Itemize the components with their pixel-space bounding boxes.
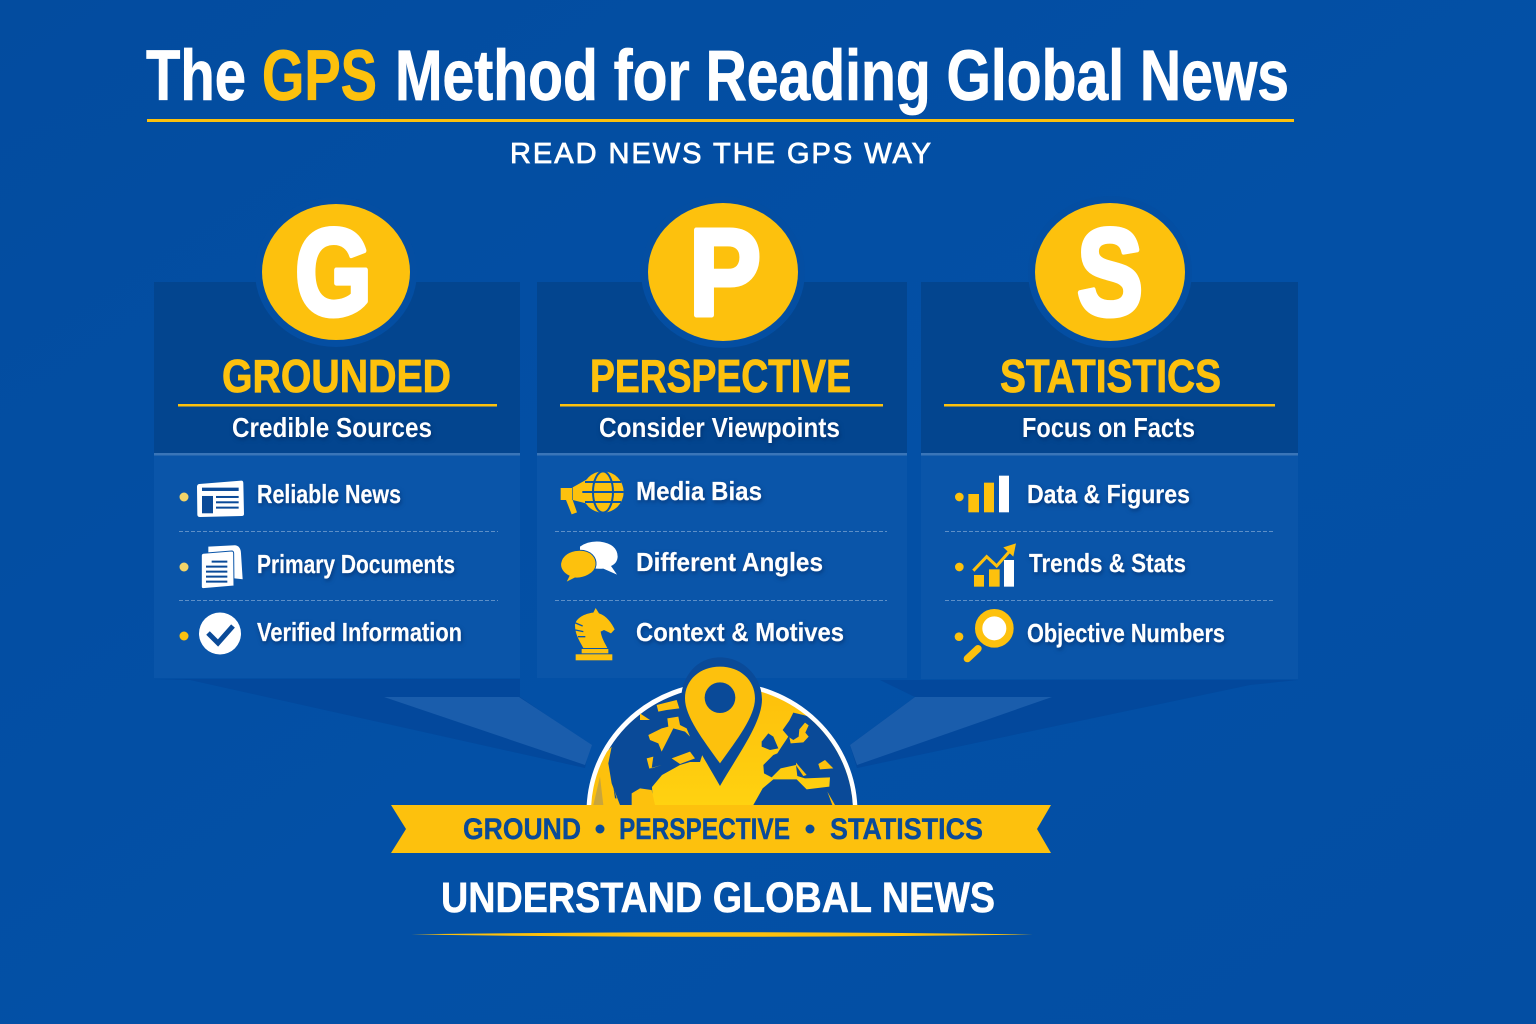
panel body background <box>921 453 1298 679</box>
ribbon banner: GROUND <box>463 813 581 846</box>
subheading: credible sources: Credible Sources <box>232 412 432 443</box>
badge S: S <box>1077 205 1143 342</box>
globe <box>586 686 858 805</box>
title underline <box>147 119 1294 122</box>
item: primary documents: Primary Documents <box>257 549 455 579</box>
item: different angles: Different Angles <box>636 547 823 577</box>
closing statement: UNDERSTAND GLOBAL NEWS <box>441 874 995 922</box>
item: objective numbers <box>955 613 1225 659</box>
subheading: consider viewpoints: Consider Viewpoints <box>599 412 840 443</box>
ribbon banner <box>391 805 1051 853</box>
heading: statistics: STATISTICS <box>1000 350 1221 402</box>
badge G: G <box>295 205 372 342</box>
beams toward globe <box>154 679 1298 768</box>
closing underline <box>411 932 1033 937</box>
item: media bias: Media Bias <box>636 476 762 506</box>
subheading: focus on facts: Focus on Facts <box>1022 412 1195 443</box>
heading: perspective: PERSPECTIVE <box>590 350 851 402</box>
item: context and motives: Context & Motives <box>636 617 844 647</box>
badge S <box>1028 196 1192 348</box>
heading: grounded: GROUNDED <box>222 350 451 402</box>
item: trends and stats <box>955 543 1186 587</box>
item: objective numbers: Objective Numbers <box>1027 618 1225 648</box>
subtitle: READ NEWS THE GPS WAY <box>510 138 931 170</box>
globe with location pin <box>586 658 858 805</box>
item: verified information <box>180 612 462 654</box>
title: GPS <box>262 37 377 116</box>
location pin <box>681 657 762 786</box>
item: trends and stats: Trends & Stats <box>1029 548 1186 578</box>
title: The <box>146 37 246 116</box>
panel header background <box>921 282 1298 453</box>
item: reliable news <box>180 479 401 517</box>
panel body background <box>154 453 520 678</box>
item: data and figures: Data & Figures <box>1027 479 1190 509</box>
badge P <box>641 196 805 348</box>
item: reliable news: Reliable News <box>257 479 401 509</box>
panel: statistics <box>921 196 1298 679</box>
item: data and figures <box>955 476 1190 512</box>
panel header background <box>154 282 520 453</box>
ribbon banner: STATISTICS <box>830 813 983 846</box>
panel: perspective <box>537 196 907 678</box>
item: primary documents <box>180 545 455 589</box>
title: Method for Reading Global News <box>395 37 1289 116</box>
item: context and motives <box>575 608 844 660</box>
badge G <box>255 197 417 347</box>
panel header background <box>537 282 907 453</box>
title <box>146 37 1289 116</box>
badge P: P <box>689 205 761 342</box>
ribbon banner: PERSPECTIVE <box>619 813 790 846</box>
item: verified information: Verified Information <box>257 617 462 647</box>
item: different angles <box>561 542 823 583</box>
panel: grounded <box>154 197 520 678</box>
panel body background <box>537 453 907 678</box>
item: media bias <box>561 471 762 514</box>
